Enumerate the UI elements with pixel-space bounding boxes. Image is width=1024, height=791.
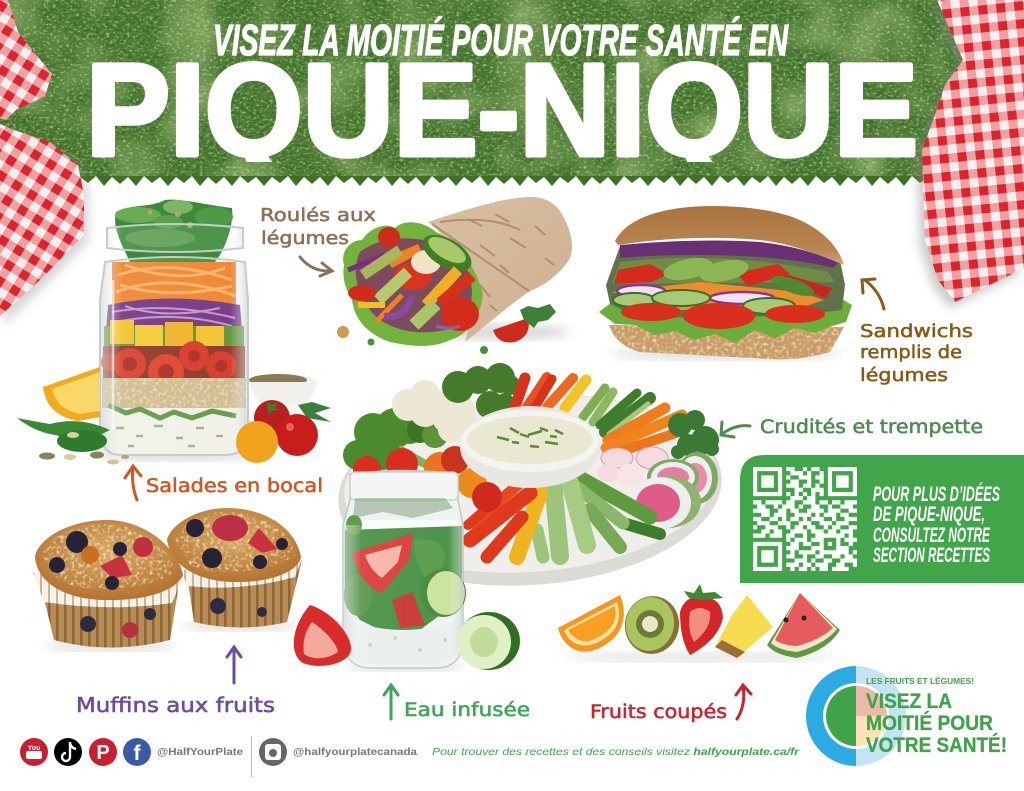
food: seed bowl <box>249 374 331 422</box>
label: roulés aux légumes <box>260 205 376 249</box>
label: salades en bocal: Salades en bocal <box>146 476 323 497</box>
footer social: instagram <box>259 738 287 766</box>
food: veggie platter <box>332 363 728 598</box>
footer social: youtube <box>20 738 48 766</box>
food: strawberry <box>294 605 351 666</box>
arrow: eau <box>384 685 398 719</box>
food: infused water jar <box>343 470 466 671</box>
label: sandwichs remplis de légumes: remplis de <box>860 342 962 363</box>
footer social: facebook <box>123 738 151 766</box>
food: cucumber slice <box>457 612 520 670</box>
QR code <box>753 469 857 569</box>
arrow: sandwichs <box>862 279 884 309</box>
label: sandwichs remplis de légumes <box>860 321 973 386</box>
label: roulés aux légumes: légumes <box>261 228 349 249</box>
food: muffin right <box>167 508 303 631</box>
food: cut fruits <box>558 584 840 662</box>
arrow: salades <box>125 466 141 500</box>
footer social: pinterest: P <box>96 742 110 764</box>
label: fruits coupés: Fruits coupés <box>590 702 727 723</box>
logo: half your plate: LES FRUITS ET LÉGUMES! <box>866 677 974 686</box>
QR panel <box>740 455 1024 583</box>
arrow: roulés <box>300 257 332 276</box>
strawberry <box>680 584 723 655</box>
arrow: fruits <box>736 685 751 719</box>
food: vegetable wrap <box>343 197 572 346</box>
footer note: Pour trouver des recettes et des conseils visitez halfyourplate.ca/fr <box>432 746 800 758</box>
picnic cloth left <box>0 0 88 325</box>
broccoli left <box>343 408 448 470</box>
logo: half your plate: VOTRE SANTÉ! <box>866 734 1007 757</box>
arrow: crudités <box>721 422 750 437</box>
food: lemon and leaves <box>17 367 129 464</box>
logo: half your plate: MOITIÉ POUR <box>866 712 993 735</box>
food: tomatoes <box>236 400 318 463</box>
footer divider <box>251 736 252 777</box>
label: crudités et trempette: Crudités et trempette <box>760 417 983 438</box>
food: salad jar <box>90 200 260 461</box>
parsley garnish <box>668 410 719 459</box>
footer social: pinterest <box>89 738 117 766</box>
pineapple <box>715 595 773 658</box>
label: muffins aux fruits: Muffins aux fruits <box>76 693 275 717</box>
footer handle: instagram: @halfyourplatecanada <box>293 746 417 758</box>
cauliflower <box>392 380 479 442</box>
footer social: tiktok <box>54 738 82 766</box>
logo: half your plate: VISEZ LA <box>866 690 952 713</box>
label: sandwichs remplis de légumes: légumes <box>860 365 948 386</box>
food: tomato slice and herbs beside wrap <box>337 304 556 354</box>
orange slice <box>558 595 624 652</box>
label: eau infusée: Eau infusée <box>404 700 530 721</box>
footer social: youtube: You <box>28 745 40 752</box>
watermelon <box>767 593 840 658</box>
food: muffin left <box>33 520 185 651</box>
footer social: facebook: f <box>134 742 142 765</box>
label: roulés aux légumes: Roulés aux <box>260 205 376 226</box>
food: sandwich <box>599 206 852 360</box>
logo: half your plate <box>806 666 1007 766</box>
grass banner <box>0 0 1024 186</box>
QR caption <box>873 483 1000 567</box>
broccoli top <box>442 363 520 419</box>
label: sandwichs remplis de légumes: Sandwichs <box>860 321 973 342</box>
picnic cloth right <box>917 0 1024 308</box>
kiwi <box>620 591 684 659</box>
main title: pique-nique: PIQUE-NIQUE <box>86 36 918 183</box>
footer handle: half your plate: @HalfYourPlate <box>157 746 243 758</box>
arrow: muffins <box>227 647 241 683</box>
